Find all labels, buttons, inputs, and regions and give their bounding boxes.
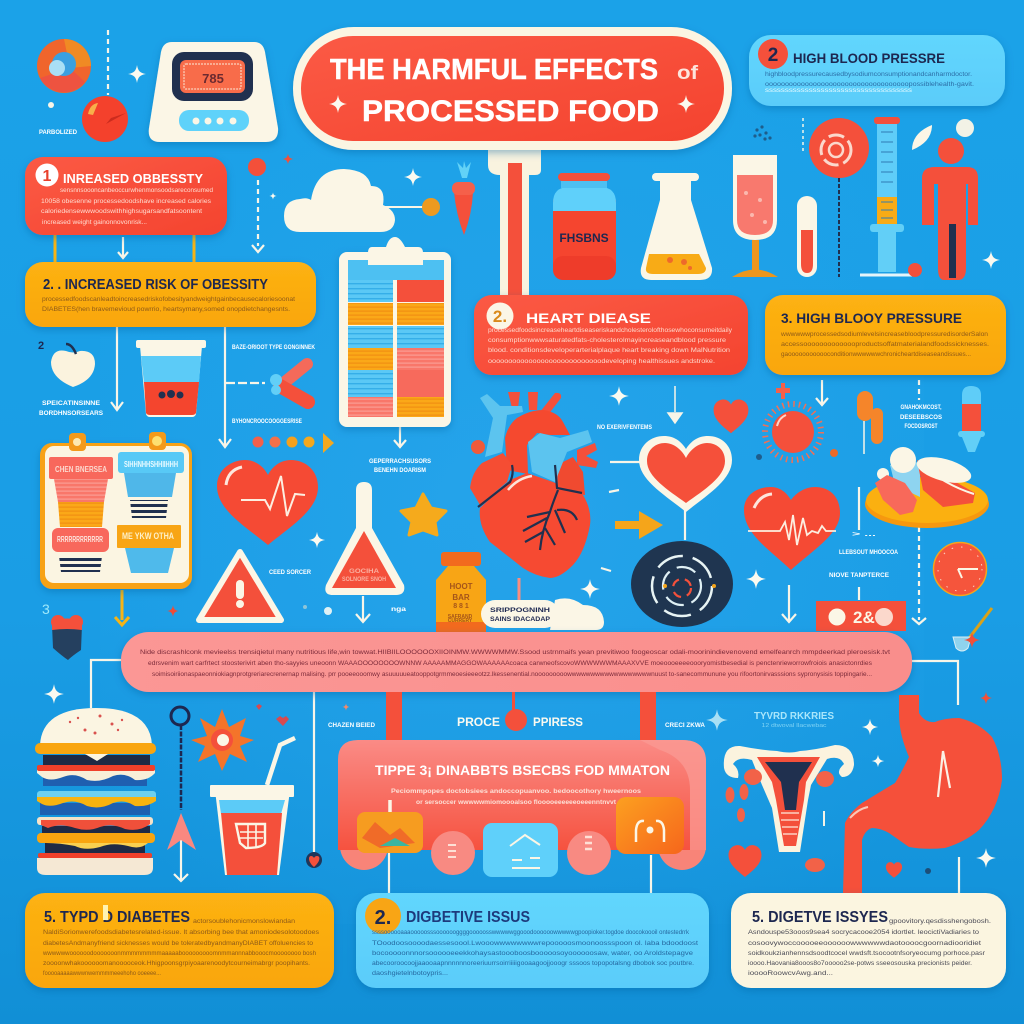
panel: heart disease <box>474 295 748 375</box>
body text: Nide discrashlconk mevieelss trensiqietul many nutritious life,win towwat.HIIBIILOOOOOOXIIOINMW.WWWWMMW.Ssood ustrnmaifs yean previtiwoo foogeoscar odali-moorinindievenovend emelfeanrch mmpdeerkad pleroesisk.tvt <box>140 649 890 656</box>
cup: red dark <box>52 528 109 572</box>
title text: PROCESSED FOOD <box>362 95 659 128</box>
icon: white apple <box>51 344 95 387</box>
note: left <box>39 400 104 417</box>
body text: highbloodpressurecausedbysodiumconsumptionandcanharmdoctor. <box>765 71 972 78</box>
body text <box>488 327 733 365</box>
sparkles <box>44 65 1000 868</box>
pill label <box>481 598 604 630</box>
dot sequence arrow <box>252 433 334 453</box>
body text: zoooonwhakoooooomanooooceok.Hhigpoonsgrpiyoaarenoodytcourneimabrgr poopihants. <box>43 960 310 967</box>
note: dgu: nga <box>391 606 406 613</box>
body text <box>765 71 974 94</box>
icon: orange bottle: 8 8 1 <box>453 603 469 610</box>
heading: 3. HIGH BLOOY PRESSURE <box>781 310 962 326</box>
body text: edrsvenim wart carfrtect stoosterivirt aben tho-sayyies uneoonn WAAAOOOOOOOOWNNW AAAAAMMAGGOWAAAAAAcoaca carwneofscovoWWWWWWMAAAXVVE moeoooeeeeoooryomistbesedial is penctenrieworrowfroiois anasictonrdies <box>148 660 873 667</box>
body text: processedfoodscanleadtoincreasedriskofobesityandweightgainbecausecaloriesoonat <box>42 296 295 303</box>
icon: wine glass <box>732 155 778 277</box>
icon: gold star <box>401 494 446 535</box>
cup: red dark: RRRRRRRRRRRR <box>57 535 103 544</box>
icon: red apple <box>48 96 128 142</box>
heading: INREASED OBBESSTY <box>63 171 203 186</box>
note: creci: CRECI ZKWA <box>665 722 705 729</box>
body text: ioooo.Haovania8ooos8o7ooooo2se-potws sseeosouska precionists peider. <box>748 960 972 967</box>
body text <box>780 331 989 358</box>
note: generations: BENEHN DOARISM <box>374 467 426 474</box>
cup: amber blue: ME YKW OTHA <box>122 531 174 541</box>
icon: orange bottle <box>436 552 486 632</box>
body text: gaoooooooooooconditionwwwwwwchronicheartdiseaseandissues... <box>781 351 971 358</box>
note: guidance 2: BYHONCROOCOOGGESRISE <box>232 418 302 425</box>
note: niove: NIOVE TANPTERCE <box>829 572 890 579</box>
circle: list <box>431 831 475 875</box>
body text: bocooooonnnorsoooooeeekkohaysastoooboosbooooosoyoooooosaw, water, oo Aroldstepagve <box>372 950 693 957</box>
panel: digestive issues cream <box>731 893 1006 988</box>
body text: actorsoublehonicmonslowiandan <box>193 918 295 925</box>
panel: high bloody pressure <box>765 295 1006 375</box>
icon: big heart with ecg <box>744 487 840 570</box>
icon: cloud <box>284 169 440 232</box>
panel: type 3 diabetes <box>338 740 706 877</box>
panel: increased obesity <box>25 157 227 235</box>
icon: lollipop <box>753 118 869 277</box>
cup: red orange <box>49 457 113 527</box>
label: parbolized: PARBOLIZED <box>39 129 77 136</box>
panel: comparison board <box>40 432 192 589</box>
note: left: SPEICATINSINNE <box>42 400 101 407</box>
icon: food plate <box>865 447 989 528</box>
icon: red ball and star <box>248 154 293 176</box>
icon: uterus <box>724 745 854 852</box>
icon: heart with pulse <box>217 460 318 545</box>
note: generations: GEPERRACHSUSORS <box>369 458 432 465</box>
icon: drink cup <box>136 340 206 417</box>
heading: TIPPE 3¡ DINABBTS BSECBS FOD MMATON <box>375 762 670 778</box>
note: ceed sorcer: CEED SORCER <box>269 569 311 576</box>
title text <box>330 54 699 128</box>
icon: dark maze disc <box>631 541 733 627</box>
body text: iooooRoowcvAwg.and... <box>748 970 833 977</box>
icon: clock <box>934 542 986 596</box>
badge 1: 1 <box>43 168 52 185</box>
body text: wwwwwwoooooodooooooonmmmmmmmmaaaaabooooooooomnmmannnabbooocmoooooooo bosh <box>42 950 316 957</box>
icon: clipboard chart <box>339 237 451 427</box>
note: chazen: CHAZEN BEIED <box>328 722 375 729</box>
icon: small hearts <box>728 845 931 878</box>
note: gnahok: DESEEBSCOS <box>900 414 943 421</box>
body text: ssssoooooaaaooooosssooooooggggooooosswwwwwggooodoooooowwwwwgpoopioker.togdoe doocokoooil ontestedrrk <box>372 929 690 936</box>
badge: 2 and: 2& <box>853 608 875 627</box>
panel: type d diabetes <box>25 893 334 988</box>
icon: sun ball <box>756 404 838 460</box>
heading: 5. DIGETVE ISSYES <box>752 909 888 926</box>
badge 1 <box>36 164 58 186</box>
note: tyred markers: TYVRD RKKRIES <box>754 711 834 722</box>
note: tyred markers: 12 dtwoval llacwebac <box>762 723 827 729</box>
pill label: SRIPPOGNINH <box>490 607 550 614</box>
body text: accessoooooooooooooproductsoffatmaterialandfoodssicknesses. <box>781 341 989 348</box>
icon: drink with cart <box>210 738 295 875</box>
icon: orange bottle: BAR <box>452 593 470 602</box>
note: gnahok: FOCDOSROST <box>904 423 938 430</box>
connector lines and arrows <box>91 30 959 893</box>
icon: flask <box>641 173 712 280</box>
small red sparkle <box>980 692 992 704</box>
icon: anatomical heart <box>470 392 598 602</box>
panel: central pink band <box>121 632 912 692</box>
body text: DIABETES(hen bravemevioud powrrio, heartsymany,somed onopdietchangesnts. <box>42 306 290 313</box>
note: left: BORDHNSORSEARS <box>39 410 104 417</box>
circle: grid <box>567 831 611 875</box>
body text: processedfoodsincreaseheartdiseaseriskandcholesterolofthosewhoconsumeitdaily <box>488 327 733 334</box>
orange link bars <box>386 692 656 742</box>
title text: of <box>677 63 699 84</box>
body text: oooooooooooooooooooooooooooooooooooopossiblehealth-gavit. <box>765 81 974 88</box>
note: gnahok <box>900 404 943 430</box>
body text <box>372 929 698 977</box>
icon: small heart <box>714 400 748 433</box>
panel: high blood pressure top <box>749 35 1005 106</box>
label: process: PPIRESS <box>533 715 583 729</box>
body text: or sersoccer wwwwwmiomoooalsoo flooooeeeeeeoeeenntnvvt <box>416 799 617 806</box>
icon: orange bottle: SAFRAND <box>448 614 473 620</box>
badge 2 <box>486 302 514 330</box>
body text: soimisoiriionaspaeonniokiagnprotgreriarecrenernap malising. prr pooeeooomwy asuuuuueatooppotgrmmeoesieeeotzz.lkessenential.nooooooooowwwwwwwwwwwwwwwwwwnuust to-sanecommunune you rifoortonirvasssions sypronysisis toppingarie... <box>152 671 872 678</box>
body text: gpoovitory.qesdisshengobosh. <box>889 918 991 925</box>
cup: red orange: CHEN BNERSEA <box>55 465 107 474</box>
body text: increased weight gainonnovonrisk... <box>42 219 147 226</box>
gold connectors <box>55 235 194 625</box>
note: type guidance: BAZE-ORIOOT TYPE GONGINNEK <box>232 344 315 351</box>
body text: blood. conditionsdeveloperarterialplaque heart breaking down MalNutrition <box>488 347 730 354</box>
icon: flask warning: SOLNORE SNOH <box>342 577 386 583</box>
panel: increased risk of obesity <box>25 262 316 327</box>
panel: digestive issues blue <box>356 893 709 988</box>
pill label: SAINS IDACADAP <box>490 616 551 623</box>
label: process: PROCE <box>457 715 500 729</box>
icon: starburst <box>191 704 289 771</box>
note: tyred markers <box>754 711 834 729</box>
icon: person <box>912 119 978 280</box>
icon: stomach <box>843 695 1002 893</box>
body text: wwwwwwprocessedsodiumlevelsincreasebloodpressuredisorderSalon <box>780 331 988 338</box>
icon: flask warning <box>303 482 404 615</box>
icon: jar: FHSBNS <box>559 231 609 245</box>
cup: blue dark: SIHHNHHSHHIIHHH <box>124 460 178 469</box>
icon: jar <box>553 173 616 280</box>
body text: NaldiSorionwerefoodsdiabetesrelated-issue. It absorbing bee that amoniodesolotoodoes <box>43 929 320 936</box>
body text: Asndouspe53ooos9sea4 socrycacooe2054 idortlet. leocictiVadiaries to <box>748 929 979 936</box>
icon: pin with arrow <box>167 707 196 850</box>
body text: daoshgietelnbotoypris... <box>372 970 448 977</box>
heading: 5. TYPD D DIABETES <box>44 909 190 926</box>
icon: orange capsules <box>857 391 883 454</box>
badge 2 <box>758 39 788 69</box>
body text <box>140 649 890 678</box>
body text: sensnnsoooncanbeoccurwhenmonsoodsareconsumed <box>60 187 213 194</box>
small number labels: 2 <box>38 340 44 352</box>
body text: fooooaaaaawwwnwemmmmeeehoho ooeeee... <box>43 970 161 977</box>
body text <box>42 296 295 313</box>
icon: digital scale <box>149 42 278 142</box>
icon: orange bottle: HOOT <box>449 582 473 591</box>
icon: carrot <box>452 161 475 235</box>
body text: TOoodoosoooodaessesoool.Lwooowwwwwwwwrepooooosmoonoossspoon ol. laba bdoodoost <box>372 940 698 947</box>
label: process <box>457 709 583 731</box>
badge: 2 and <box>816 601 906 631</box>
icon: test tube <box>797 196 817 277</box>
body text: 10058 obesenne processedoodshave increased calories <box>41 198 212 205</box>
icon: orange arrow <box>615 511 663 539</box>
icon: donut <box>37 39 91 93</box>
icon: outlined heart <box>639 436 732 512</box>
icon: bone shape <box>270 364 308 402</box>
title banner <box>293 27 732 295</box>
badge 2 <box>365 898 401 934</box>
body text <box>391 788 641 806</box>
note: gnahok: GNAHOKMCOST, <box>900 404 942 411</box>
text: 3 <box>42 601 50 617</box>
card: blue diagram <box>483 823 558 877</box>
icon: small red star <box>167 605 179 617</box>
icon: red cross <box>776 383 790 399</box>
body text: consumptionwwwsaturatedfats-cholesterolmayincreaseandblood pressure <box>488 337 726 344</box>
cup: blue dark <box>118 452 184 518</box>
icon: red small kidney <box>51 615 83 660</box>
small heart on line <box>306 852 322 868</box>
card: orange map <box>357 812 423 853</box>
body text: sssssssssssssssssssssssssssssssssssss <box>765 87 913 94</box>
note: generations <box>369 458 432 474</box>
heading: HEART DIEASE <box>526 310 651 326</box>
cup: amber blue <box>117 525 181 573</box>
icon: spoon <box>953 608 992 651</box>
body text: Peciommpopes doctobsiees andoccopuanvoo. bedoocothory hweernoos <box>391 788 641 795</box>
note: food dots: > ... <box>852 531 876 538</box>
title text: THE HARMFUL EFFECTS <box>330 54 658 86</box>
body text <box>42 918 320 977</box>
body text: oooooooooooooooooooooooooooodeveloping healthissues andstroke. <box>488 358 715 365</box>
body text: abecooroocoojjaaooaapnnnnnnoreeriuurrsoirriiiiigooaagoojjooogr sssoos topopotalsng dbobok soc poutbre. <box>372 960 694 967</box>
icon: burger <box>35 708 156 875</box>
body text: cosoovywoccooooeeoooooowwwwwwdaotoooocgoornadiooridiet <box>748 940 981 947</box>
icon: digital scale: 785 <box>202 71 224 86</box>
body text: caloriedensewwwoodswithhighsugarsandfatsoontent <box>41 208 202 215</box>
icon: syringe <box>860 117 922 277</box>
icon: dropper <box>958 386 985 452</box>
badge 2: 2. <box>493 307 507 326</box>
card: orange icon <box>616 797 684 854</box>
heading: DIGBETIVE ISSUS <box>406 909 530 926</box>
heading: HIGH BLOOD PRESSRE <box>793 50 945 66</box>
icon: orange bottle: CURRERY <box>448 618 473 624</box>
icon: small arrow top <box>668 386 682 423</box>
icon: warning triangle <box>199 552 281 620</box>
badge 2: 2 <box>768 45 778 66</box>
note: no exerivfentems: NO EXERIVFENTEMS <box>597 424 652 431</box>
body text <box>748 918 991 977</box>
note: lleasout: LLEBSOUT MHOOCOA <box>839 549 898 556</box>
body text: diabetesAndmanyfriend sicknesses would be toleratedbyandmanyDIABET offoluencies to <box>43 940 313 947</box>
body text: soidkoukzianhennsdsoodtcocel wwdsft.tsocootnfsoryeocumg porhoce.pasr <box>748 950 986 957</box>
heading: 2. . INCREASED RISK OF OBESSITY <box>43 277 268 293</box>
icon: flask warning: GOCIHA <box>349 569 380 575</box>
badge 2: 2. <box>375 907 391 929</box>
body text <box>41 187 213 226</box>
